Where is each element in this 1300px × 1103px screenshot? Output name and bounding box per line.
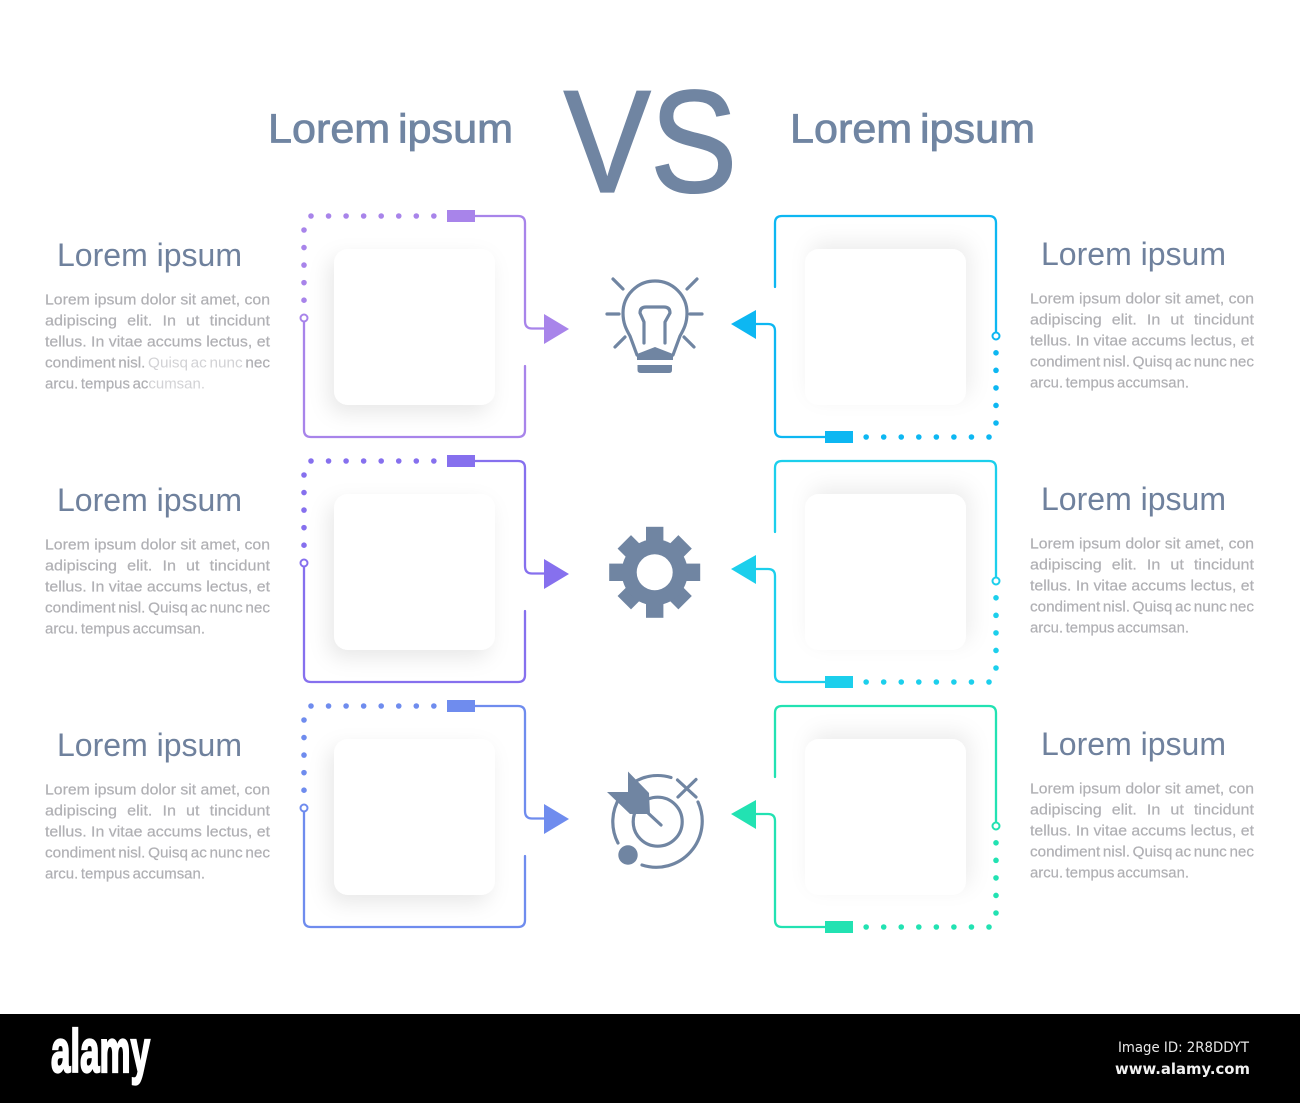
title: VS: VS [564,60,737,222]
connector tab [447,455,475,467]
connector tab [825,921,853,933]
text block: adipiscing elit. In ut tincidunt [1030,802,1254,818]
icon: gear [609,527,700,618]
connector tab [825,431,853,443]
connector tab [447,700,475,712]
connector frame [754,706,1000,927]
text block: condiment nisl. Quisq ac nunc nec [1030,354,1254,370]
text block [45,538,270,638]
text block: condiment nisl. Quisq ac nunc nec [45,356,270,372]
arrow [544,559,569,589]
text block: adipiscing elit. In ut tincidunt [1030,312,1254,328]
footer logo: alamy [51,1018,150,1085]
text block: arcu. tempus accumsan. [1030,376,1189,392]
panel: right row 2 [731,461,1254,688]
footer bar [0,1014,1300,1103]
text block [1030,782,1254,882]
text block: adipiscing elit. In ut tincidunt [1030,558,1254,574]
heading: Lorem ipsum [57,727,242,763]
heading: left comparison: Lorem ipsum [268,106,513,152]
text block: Lorem ipsum dolor sit amet, con [45,292,270,308]
text block: adipiscing elit. In ut tincidunt [45,804,270,820]
text block: arcu. tempus accumsan. [1030,620,1189,636]
text block: adipiscing elit. In ut tincidunt [45,558,270,574]
text block: condiment nisl. Quisq ac nunc nec [1030,844,1254,860]
text block: Lorem ipsum dolor sit amet, con [45,538,270,554]
text block: condiment nisl. Quisq ac nunc nec [45,846,270,862]
text block: tellus. In vitae accums lectus, et [1030,824,1254,840]
panel: left row 3 [45,700,569,927]
arrow [544,804,569,834]
heading: Lorem ipsum [57,237,242,273]
icon: light bulb [607,279,702,373]
panel: left row 1 [45,210,569,437]
text block: tellus. In vitae accums lectus, et [1030,334,1254,350]
card [805,739,966,895]
card [334,249,495,405]
panel: left row 2 [45,455,569,682]
heading: Lorem ipsum [57,482,242,518]
text block: arcu. tempus accumsan. [45,622,205,638]
text block: arcu. tempus accumsan. [45,376,205,392]
card [805,249,966,405]
text block [1030,292,1254,392]
icon: target with dart [607,772,702,867]
text block [45,292,270,392]
text block: condiment nisl. Quisq ac nunc nec [1030,600,1254,616]
text block: tellus. In vitae accums lectus, et [45,824,270,840]
arrow [731,310,756,339]
text block: condiment nisl. Quisq ac nunc nec [45,600,270,616]
footer url: www.alamy.com [1115,1060,1250,1078]
heading: Lorem ipsum [1041,481,1226,517]
connector frame [300,216,546,437]
connector frame [754,461,1000,682]
connector frame [300,461,546,682]
arrow [731,800,756,829]
card [805,494,966,650]
text block: adipiscing elit. In ut tincidunt [45,314,270,330]
text block: tellus. In vitae accums lectus, et [1030,578,1254,594]
connector frame [300,706,546,927]
card [334,739,495,895]
text block [45,782,270,882]
text block: Lorem ipsum dolor sit amet, con [45,782,270,798]
text block: Lorem ipsum dolor sit amet, con [1030,292,1254,308]
panel: right row 3 [731,706,1254,933]
arrow [731,555,756,584]
connector frame [754,216,1000,437]
text block: tellus. In vitae accums lectus, et [45,580,270,596]
text block: arcu. tempus accumsan. [45,866,205,882]
arrow [544,314,569,344]
card [334,494,495,650]
text block [1030,536,1254,636]
text block: Lorem ipsum dolor sit amet, con [1030,782,1254,798]
text block: Lorem ipsum dolor sit amet, con [1030,536,1254,552]
text block: tellus. In vitae accums lectus, et [45,334,270,350]
connector tab [825,676,853,688]
text block: arcu. tempus accumsan. [1030,866,1189,882]
panel: right row 1 [731,216,1254,443]
heading: right comparison: Lorem ipsum [790,106,1035,152]
connector tab [447,210,475,222]
footer image id: Image ID: 2R8DDYT [1118,1040,1249,1056]
heading: Lorem ipsum [1041,236,1226,272]
heading: Lorem ipsum [1041,726,1226,762]
